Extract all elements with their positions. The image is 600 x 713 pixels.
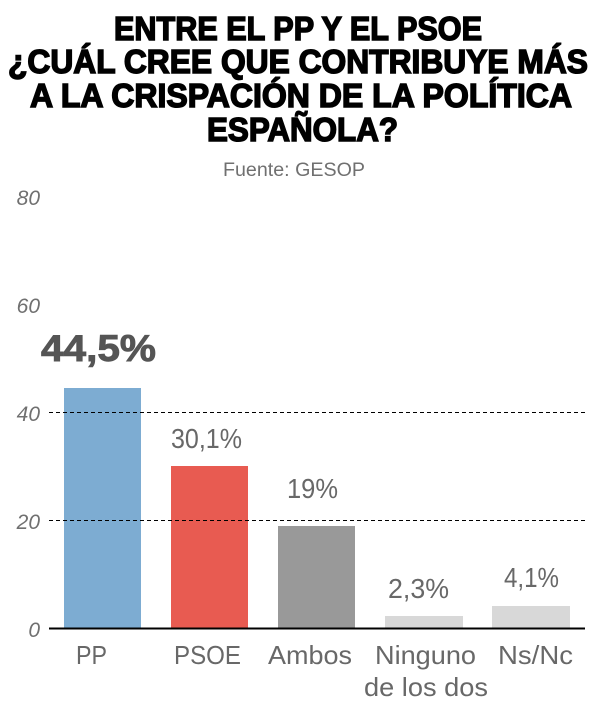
category labels: Ambos (268, 640, 352, 670)
category labels: Ns/Nc (498, 640, 573, 670)
source line: Fuente: GESOP (223, 160, 365, 181)
title: A LA CRISPACIÓN DE LA POLÍTICA (30, 77, 572, 114)
title (8, 10, 588, 148)
gridline 40 (49, 412, 585, 414)
bar: PSOE (171, 466, 248, 628)
category labels: de los dos (364, 672, 488, 702)
y axis labels: 40 (17, 403, 40, 426)
value labels: 19% (287, 473, 338, 504)
value labels: 30,1% (171, 423, 242, 454)
y axis labels: 60 (17, 295, 40, 318)
bar chart (49, 388, 585, 628)
x axis (49, 628, 585, 630)
title: ESPAÑOLA? (207, 111, 398, 148)
y axis labels: 0 (28, 619, 40, 642)
y axis labels (16, 187, 40, 642)
bar: Ambos (278, 526, 355, 628)
bar: Ninguno de los dos (385, 616, 463, 628)
category labels: PP (76, 640, 107, 670)
y axis labels: 80 (17, 187, 40, 210)
category labels: Ninguno (375, 640, 476, 670)
y axis labels: 20 (16, 511, 40, 534)
bar: Ns/Nc (492, 606, 570, 628)
category labels (76, 640, 573, 702)
gridline 20 (49, 520, 585, 522)
value labels (41, 328, 559, 604)
title: ¿CUÁL CREE QUE CONTRIBUYE MÁS (8, 43, 588, 80)
category labels: PSOE (174, 640, 241, 670)
value labels: 2,3% (388, 573, 449, 604)
bar: PP (64, 388, 141, 628)
title: ENTRE EL PP Y EL PSOE (114, 10, 482, 47)
value labels: 44,5% (41, 328, 156, 369)
value labels: 4,1% (504, 562, 559, 593)
